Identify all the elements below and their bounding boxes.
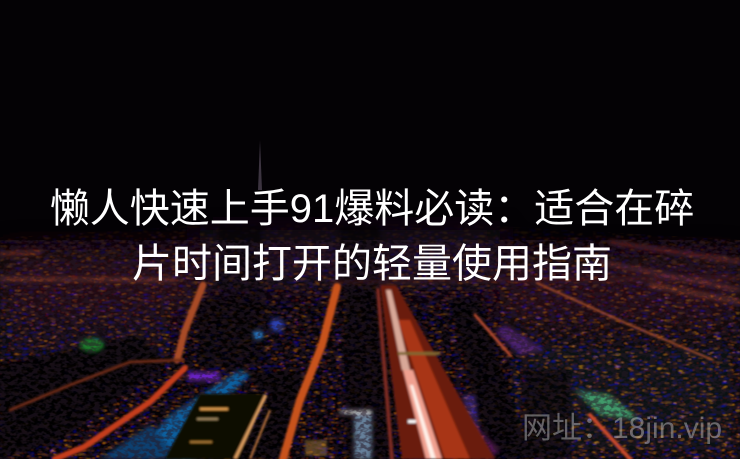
tower (258, 140, 262, 190)
city glow (0, 230, 740, 459)
colored districts (80, 318, 640, 459)
dark blocks (0, 225, 570, 459)
central highway (380, 285, 495, 459)
horizontal light bands (0, 242, 740, 302)
lights texture (0, 215, 740, 459)
title: 懒人快速上手91爆料必读：适合在碎 (50, 187, 694, 231)
title: 片时间打开的轻量使用指南 (132, 242, 612, 286)
watermark: 网址：18jin.vip (522, 412, 722, 445)
background photo: night city skyline (0, 142, 740, 459)
title (50, 187, 694, 286)
dark speckle over city (0, 240, 740, 459)
gold-edged building (165, 394, 270, 459)
roads (10, 283, 713, 459)
